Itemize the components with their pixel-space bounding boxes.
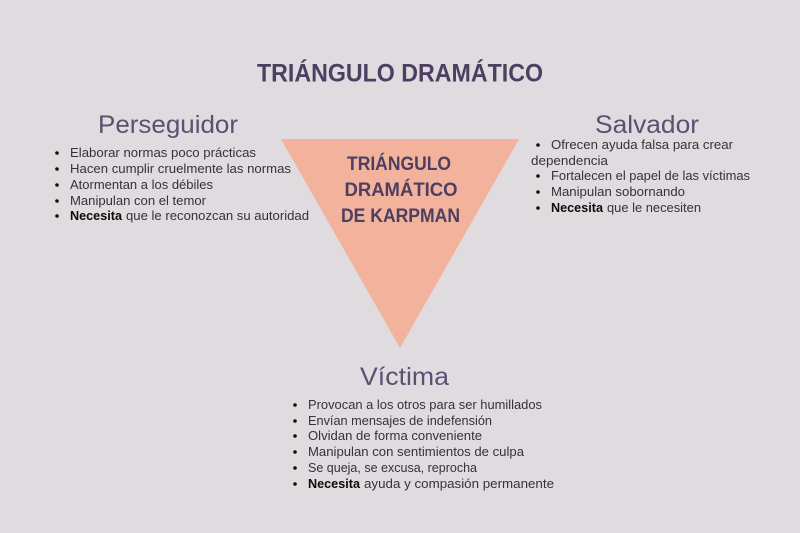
list: Salvador traits [531, 138, 750, 215]
triangle label [341, 153, 460, 227]
list: Víctima traits [293, 398, 554, 491]
panel: Víctima [293, 363, 554, 491]
list: Víctima traits: Se queja, se excusa, reprocha [308, 461, 477, 475]
list: Víctima traits: Olvidan de forma conveniente [308, 429, 482, 443]
list: Salvador traits: que le necesiten [607, 201, 701, 215]
list: Salvador traits: Manipulan sobornando [551, 185, 685, 199]
triangle label: TRIÁNGULO [347, 153, 451, 175]
list: Perseguidor traits: Manipulan con el temor [70, 194, 206, 208]
list: Víctima traits: Envían mensajes de indefensión [308, 414, 492, 428]
triangle label: DE KARPMAN [341, 206, 460, 227]
heading: Víctima: Víctima [360, 363, 449, 391]
list: Perseguidor traits: Hacen cumplir cruelmente las normas [70, 162, 291, 176]
panel: Salvador [531, 111, 750, 215]
heading: Salvador: Salvador [595, 111, 699, 139]
list: Perseguidor traits [55, 146, 309, 223]
list: Víctima traits: ayuda y compasión permanente [364, 477, 554, 491]
panel: Perseguidor [55, 111, 309, 223]
triangle label: DRAMÁTICO [344, 179, 458, 201]
list: Salvador traits: Necesita [551, 201, 604, 215]
list: Perseguidor traits: que le reconozcan su autoridad [126, 209, 309, 223]
list: Perseguidor traits: Elaborar normas poco prácticas [70, 146, 256, 160]
list: Salvador traits: dependencia [531, 154, 608, 168]
list: Perseguidor traits: Necesita [70, 209, 123, 223]
title: TRIÁNGULO DRAMÁTICO [257, 58, 543, 88]
list: Víctima traits: Provocan a los otros para ser humillados [308, 398, 542, 412]
list: Víctima traits: Necesita [308, 477, 361, 491]
triangle panel [281, 139, 519, 348]
list: Víctima traits: Manipulan con sentimientos de culpa [308, 445, 524, 459]
heading: Perseguidor: Perseguidor [98, 111, 238, 139]
list: Perseguidor traits: Atormentan a los débiles [70, 178, 213, 192]
triangle shape [281, 139, 519, 348]
list: Salvador traits: Ofrecen ayuda falsa para crear [551, 138, 733, 152]
list: Salvador traits: Fortalecen el papel de las víctimas [551, 169, 750, 183]
